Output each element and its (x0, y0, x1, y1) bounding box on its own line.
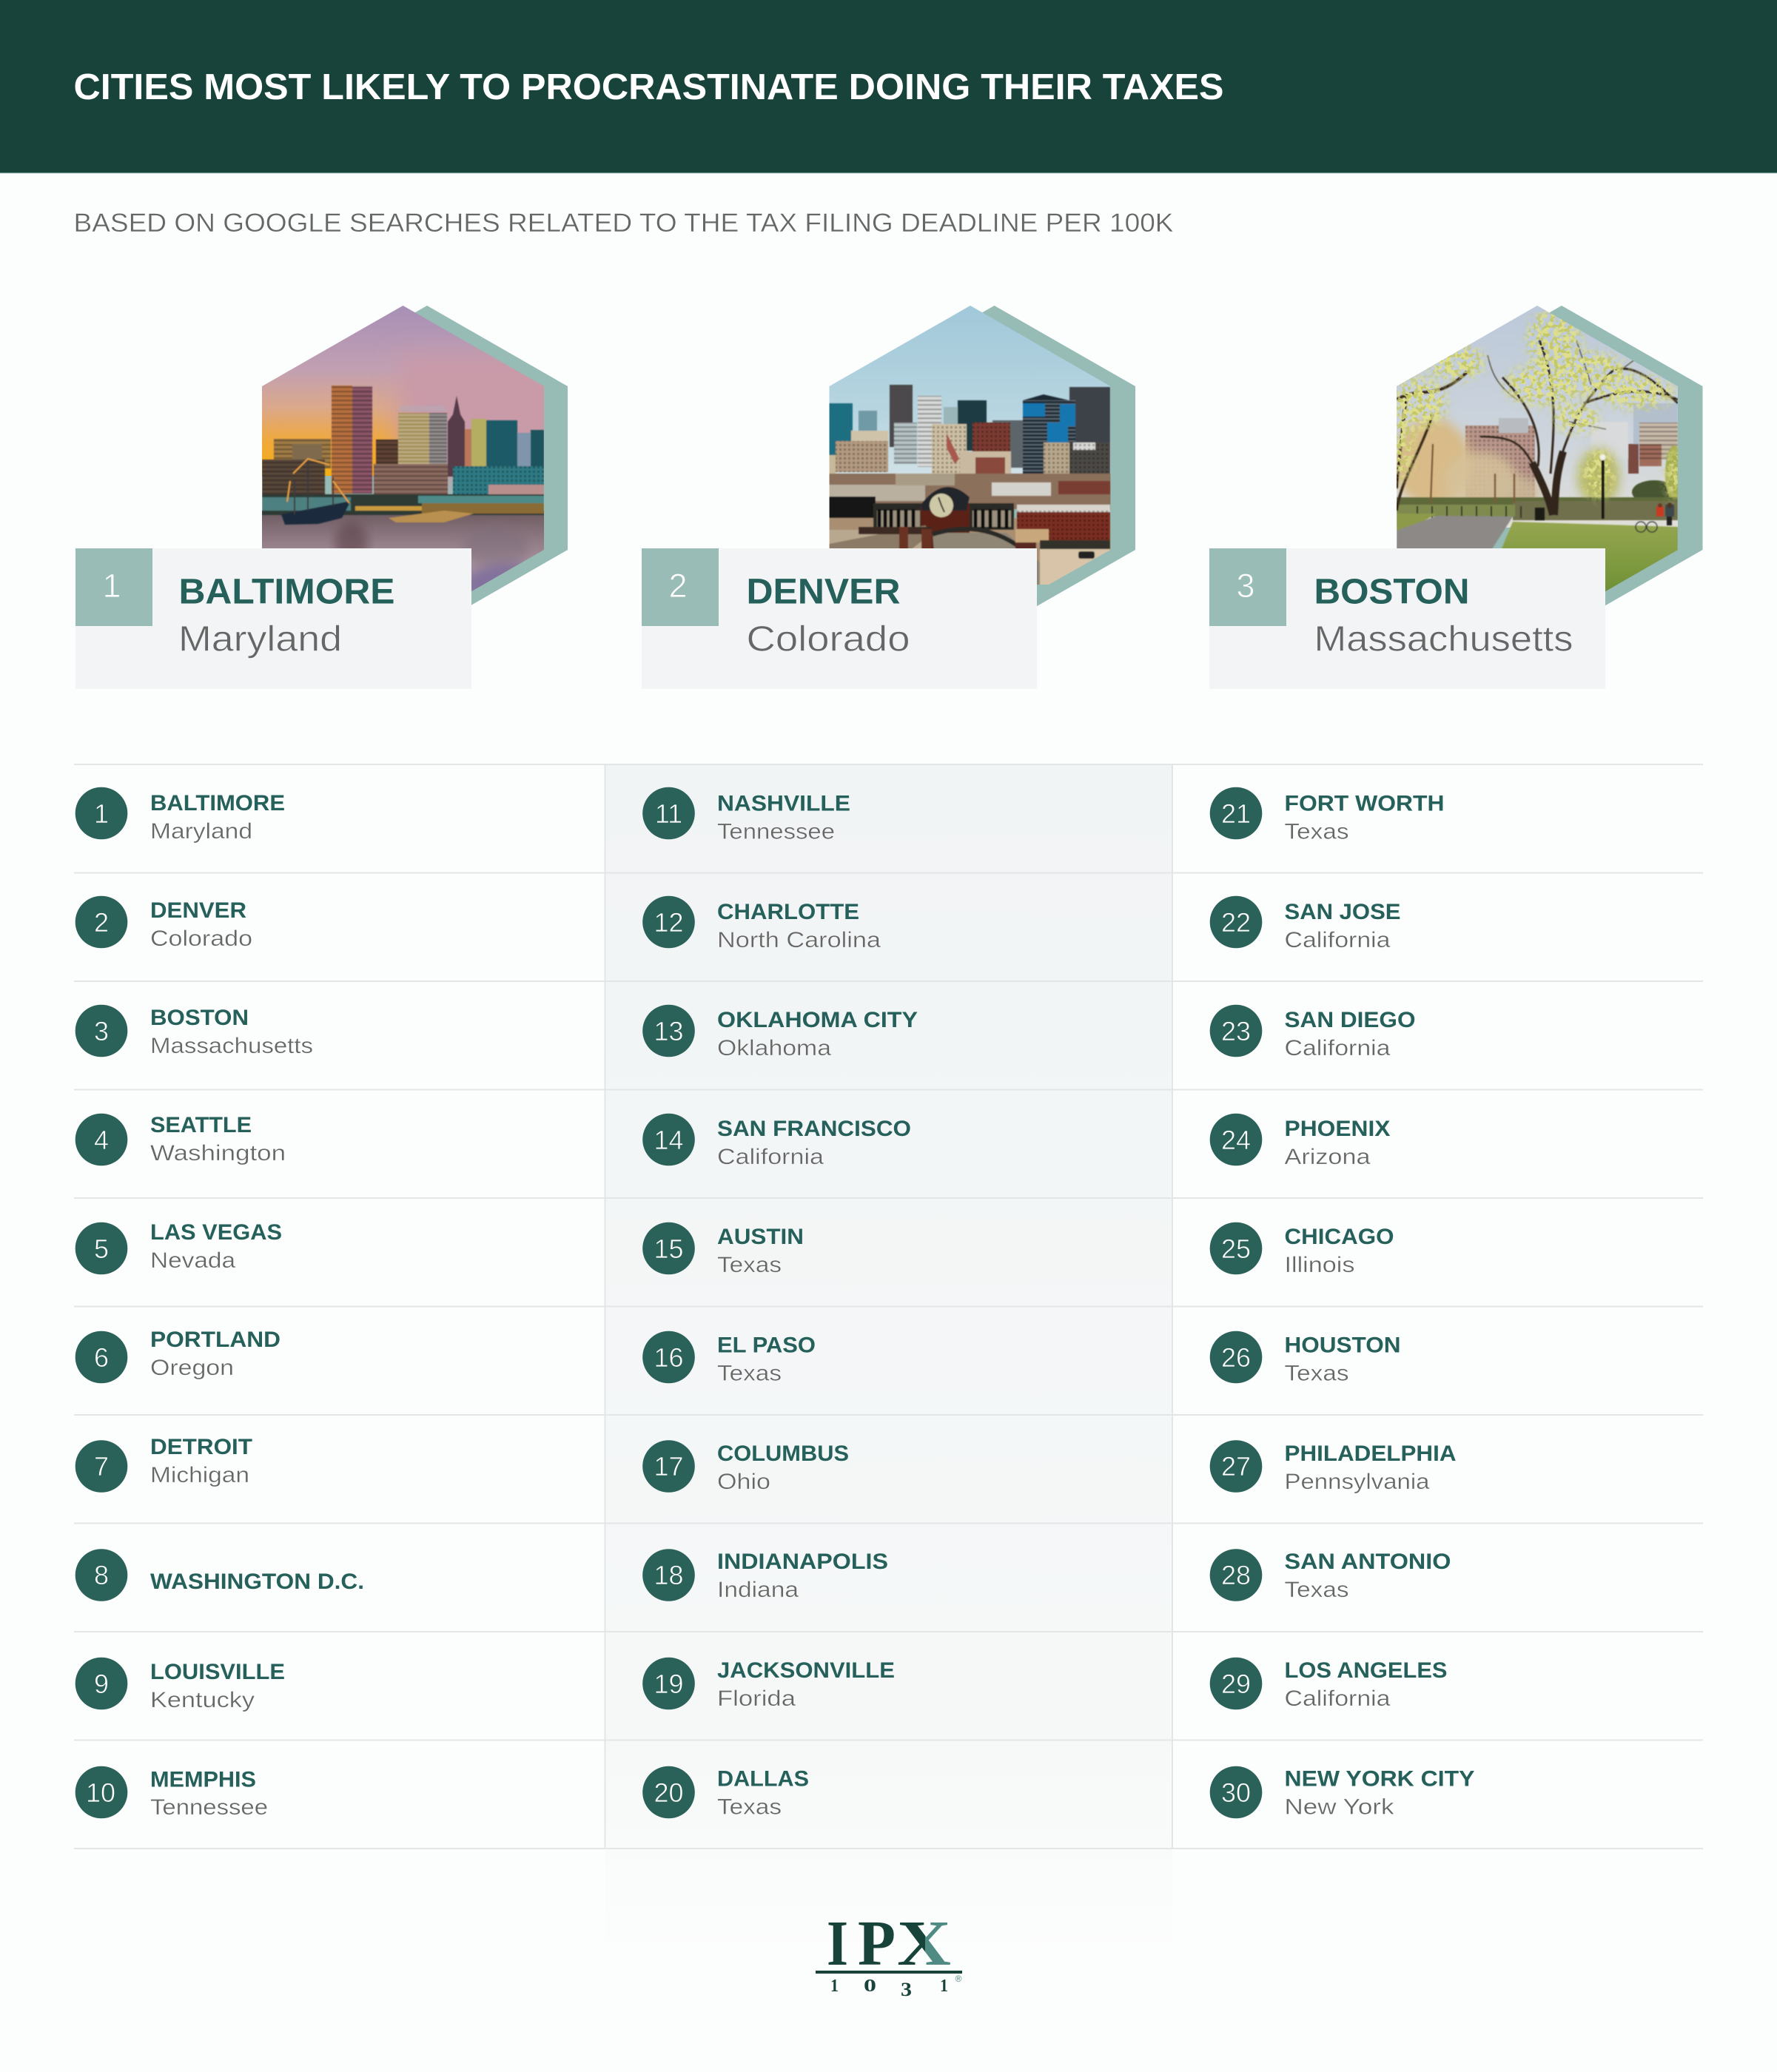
row 17 (642, 1440, 849, 1494)
row 9 (75, 1658, 285, 1712)
row 7 (75, 1435, 252, 1493)
photo: Baltimore skyline at sunset (262, 306, 544, 591)
middle column shading (605, 764, 1172, 1963)
row 7: 7 (94, 1451, 109, 1481)
row 18: Indiana (717, 1578, 799, 1602)
row 13: OKLAHOMA CITY (717, 1008, 918, 1032)
hexagon backing shape (1421, 306, 1702, 630)
hexagon backing shape (286, 306, 568, 630)
row 18: 18 (654, 1560, 684, 1590)
title: CITIES MOST LIKELY TO PROCRASTINATE DOING THEIR TAXES (74, 67, 1224, 107)
row 28: Texas (1285, 1578, 1348, 1602)
logo: IPX 1031: P (858, 1907, 896, 1979)
row 28: 28 (1221, 1560, 1251, 1590)
row 20: Texas (717, 1795, 782, 1819)
logo: IPX 1031: 1 (940, 1977, 948, 1996)
row 22: 22 (1221, 907, 1251, 938)
row 25 (1210, 1222, 1394, 1277)
row 1: Maryland (150, 819, 252, 844)
row 29: 29 (1221, 1669, 1251, 1699)
label card (75, 548, 471, 689)
row 12 (642, 896, 881, 952)
row 16: 16 (654, 1342, 684, 1373)
ranking list column 1 (75, 787, 364, 1820)
row 6: 6 (94, 1342, 109, 1373)
row 2: 2 (94, 907, 109, 938)
row 14: California (717, 1145, 824, 1169)
row 26 (1210, 1331, 1400, 1385)
header band (0, 0, 1777, 173)
row 28 (1210, 1549, 1451, 1602)
rank badge: 2 (668, 567, 688, 605)
row 19: JACKSONVILLE (717, 1658, 895, 1683)
row 12: North Carolina (717, 928, 881, 952)
row 27: 27 (1221, 1451, 1251, 1481)
row 25: CHICAGO (1285, 1225, 1394, 1249)
row 19: Florida (717, 1686, 796, 1711)
row 29: LOS ANGELES (1285, 1658, 1448, 1683)
row 17: Ohio (717, 1470, 770, 1494)
row 3: Massachusetts (150, 1034, 313, 1058)
city name: BOSTON (1314, 573, 1470, 611)
row 21: Texas (1285, 820, 1348, 844)
row 20: DALLAS (717, 1767, 809, 1791)
row 28: SAN ANTONIO (1285, 1550, 1451, 1574)
row 8: 8 (94, 1560, 109, 1590)
row 7: Michigan (150, 1463, 249, 1487)
row 14 (642, 1114, 911, 1169)
row 4: Washington (150, 1141, 286, 1166)
row 2: Colorado (150, 926, 252, 951)
logo: IPX 1031: X (897, 1907, 951, 1979)
row 5 (75, 1220, 282, 1274)
row 26: Texas (1285, 1362, 1348, 1385)
logo: IPX 1031: X (897, 1907, 951, 1979)
state name: Maryland (178, 620, 342, 659)
row 29 (1210, 1658, 1448, 1711)
ranking list column 3 (1210, 787, 1474, 1819)
row 24: 24 (1221, 1125, 1251, 1155)
row 13: Oklahoma (717, 1036, 831, 1060)
row 22: California (1285, 928, 1391, 952)
row 13 (642, 1005, 918, 1060)
row 23 (1210, 1005, 1415, 1060)
row 16 (642, 1331, 816, 1385)
row 8 (75, 1549, 364, 1601)
row 10: Tennessee (150, 1795, 268, 1820)
row 11: NASHVILLE (717, 792, 850, 815)
row 20 (642, 1766, 809, 1819)
row 6: Oregon (150, 1356, 234, 1380)
row 24: Arizona (1285, 1145, 1371, 1169)
row 23: SAN DIEGO (1285, 1008, 1415, 1032)
label card (642, 548, 1037, 689)
row 15: Texas (717, 1253, 782, 1277)
logo: IPX 1031 (816, 1923, 962, 1997)
rank badge: 3 (1236, 567, 1255, 605)
row 1: BALTIMORE (150, 791, 285, 815)
row 16: EL PASO (717, 1333, 816, 1357)
row 17: COLUMBUS (717, 1442, 849, 1466)
state name: Colorado (746, 620, 910, 659)
logo: IPX 1031: 3 (901, 1979, 912, 2000)
rank badge (75, 548, 152, 626)
city name: DENVER (746, 573, 900, 611)
row 26: 26 (1221, 1342, 1251, 1373)
hexagon backing shape (853, 306, 1135, 630)
row 18: INDIANAPOLIS (717, 1550, 888, 1574)
row 30: NEW YORK CITY (1285, 1767, 1474, 1791)
row 15 (642, 1222, 804, 1277)
row 21: FORT WORTH (1285, 792, 1445, 815)
row 12: 12 (654, 907, 684, 938)
ranking list column 2 (642, 787, 918, 1819)
row 27: Pennsylvania (1285, 1470, 1430, 1494)
panel: top city 3 Boston (1209, 306, 1702, 689)
row 19: 19 (654, 1669, 684, 1699)
row 10: 10 (86, 1777, 115, 1808)
row 16: Texas (717, 1362, 782, 1385)
row 30 (1210, 1766, 1474, 1819)
label card (1209, 548, 1605, 689)
city name: BALTIMORE (179, 573, 395, 611)
logo: IPX 1031: 1 (830, 1977, 839, 1996)
row 21 (1210, 787, 1445, 844)
row 13: 13 (654, 1016, 684, 1046)
logo: IPX 1031: ® (955, 1974, 962, 1984)
row 11: 11 (655, 798, 682, 829)
rank badge (1209, 548, 1286, 626)
row 27: PHILADELPHIA (1285, 1442, 1457, 1466)
subtitle: BASED ON GOOGLE SEARCHES RELATED TO THE TAX FILING DEADLINE PER 100K (74, 209, 1174, 238)
row 27 (1210, 1440, 1457, 1494)
logo: IPX 1031: I (827, 1907, 848, 1979)
row 22: SAN JOSE (1285, 900, 1400, 924)
row 30: 30 (1221, 1777, 1251, 1808)
row 4: 4 (94, 1125, 109, 1155)
row 15: 15 (654, 1234, 684, 1264)
row 11 (642, 787, 850, 844)
row 10: MEMPHIS (150, 1767, 256, 1792)
row 11: Tennessee (717, 820, 835, 844)
photo: Boston park with trees (1397, 306, 1678, 592)
row 5: LAS VEGAS (150, 1220, 282, 1245)
row 2 (75, 896, 252, 951)
row 14: 14 (654, 1125, 684, 1155)
row 24 (1210, 1114, 1390, 1169)
row 7: DETROIT (150, 1435, 252, 1459)
row 4 (75, 1113, 286, 1166)
state name: Massachusetts (1314, 620, 1573, 659)
row 21: 21 (1221, 798, 1251, 829)
row 25: 25 (1221, 1234, 1251, 1264)
row 3 (75, 1005, 313, 1058)
row 23: California (1285, 1036, 1391, 1060)
row 14: SAN FRANCISCO (717, 1117, 911, 1141)
row 15: AUSTIN (717, 1225, 804, 1249)
row 6: PORTLAND (150, 1328, 281, 1352)
row 19 (642, 1658, 895, 1711)
row 9: LOUISVILLE (150, 1660, 285, 1684)
row 18 (642, 1549, 888, 1602)
row 6 (75, 1328, 281, 1383)
row 3: 3 (94, 1016, 109, 1046)
rank badge (642, 548, 719, 626)
row 22 (1210, 896, 1400, 952)
row 1 (75, 787, 285, 844)
panel: top city 1 Baltimore (75, 306, 577, 689)
row 12: CHARLOTTE (717, 900, 859, 924)
row 26: HOUSTON (1285, 1333, 1400, 1357)
row 30: New York (1285, 1795, 1395, 1819)
row 5: 5 (94, 1234, 109, 1264)
photo: Denver skyline (829, 306, 1111, 588)
logo: IPX 1031: 0 (864, 1977, 876, 1996)
row 17: 17 (654, 1451, 684, 1481)
row 23: 23 (1221, 1016, 1251, 1046)
row 2: DENVER (150, 898, 246, 923)
row 3: BOSTON (150, 1006, 249, 1030)
rank badge: 1 (102, 567, 121, 605)
row 29: California (1285, 1686, 1391, 1711)
row 24: PHOENIX (1285, 1117, 1390, 1141)
row 5: Nevada (150, 1248, 235, 1273)
row 10 (75, 1766, 268, 1820)
row 4: SEATTLE (150, 1113, 252, 1137)
row 9: 9 (94, 1669, 109, 1699)
panel: top city 2 Denver (642, 306, 1135, 689)
row 20: 20 (654, 1777, 684, 1808)
row 25: Illinois (1285, 1253, 1354, 1277)
row 1: 1 (94, 798, 109, 829)
row 8: WASHINGTON D.C. (150, 1570, 364, 1594)
row 9: Kentucky (150, 1688, 255, 1712)
